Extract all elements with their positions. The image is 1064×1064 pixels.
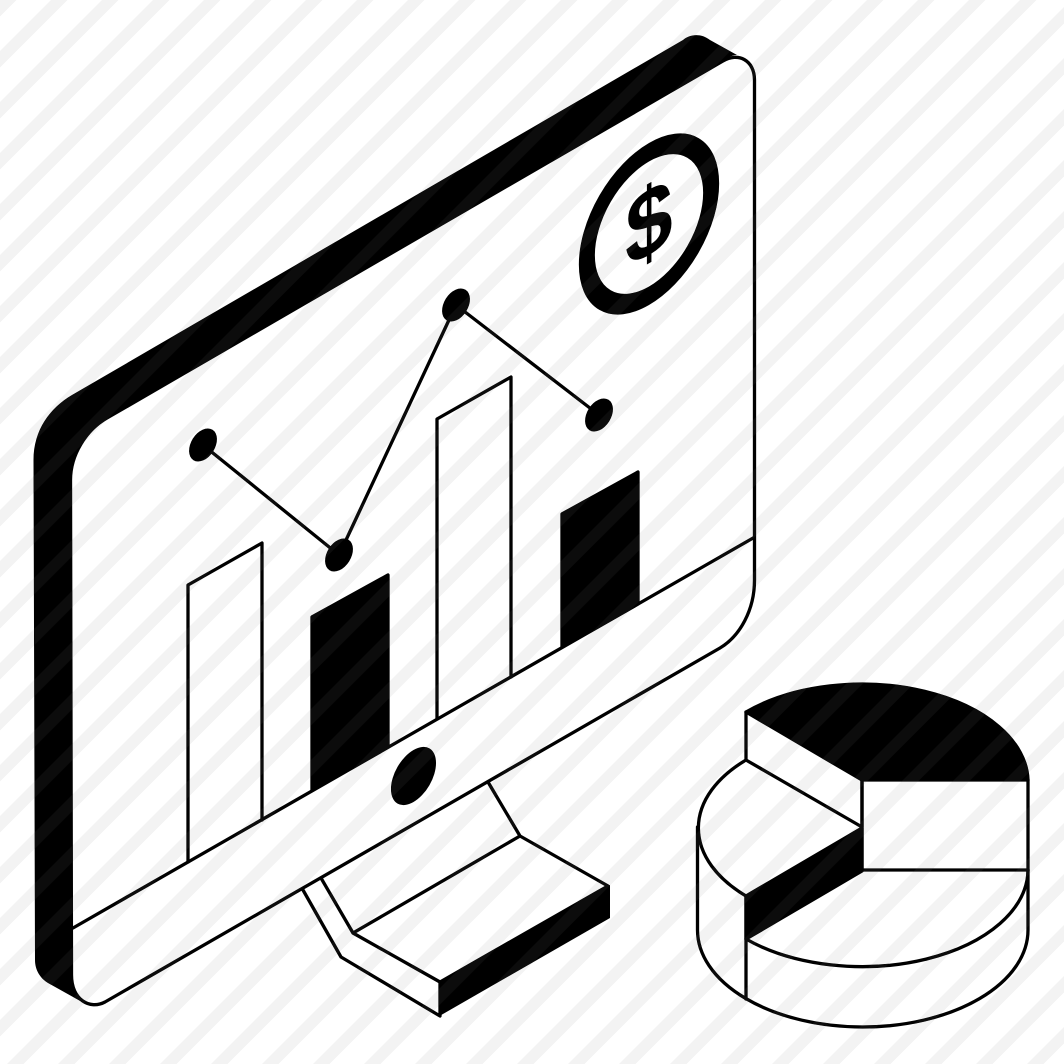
stand neck and base top [321, 782, 608, 982]
left slice top [698, 760, 746, 896]
pie dark top slice [746, 684, 1028, 780]
data point 3 [436, 283, 476, 327]
data point 4 [579, 393, 619, 437]
monitor [34, 35, 754, 1016]
bar 2 [312, 575, 388, 790]
monitor power button [391, 737, 436, 815]
bar 3 [437, 377, 511, 719]
coin ring [587, 116, 711, 332]
data point 2 [319, 533, 359, 577]
screen bottom bezel line [73, 538, 754, 928]
stand base lower edge [303, 890, 440, 1016]
monitor screen outline [70, 57, 754, 1005]
pie chart [698, 684, 1028, 1027]
monitor side frame [34, 35, 737, 1002]
slice seam [744, 896, 748, 999]
data point 1 [183, 423, 223, 467]
dark slice wall [746, 828, 862, 939]
bar 1 [188, 543, 262, 862]
line chart [183, 283, 619, 577]
monitor stand [303, 782, 610, 1016]
lower slice arc [746, 870, 1028, 967]
right side rectangle face [862, 780, 1028, 870]
stand base front face [440, 885, 610, 1016]
dollar sign: $ [625, 154, 673, 291]
bar 4 [562, 472, 638, 647]
raised slice side face [746, 712, 862, 827]
dollar coin icon [587, 116, 711, 332]
trend line [203, 305, 599, 555]
cylinder outer wall [698, 827, 1028, 1027]
